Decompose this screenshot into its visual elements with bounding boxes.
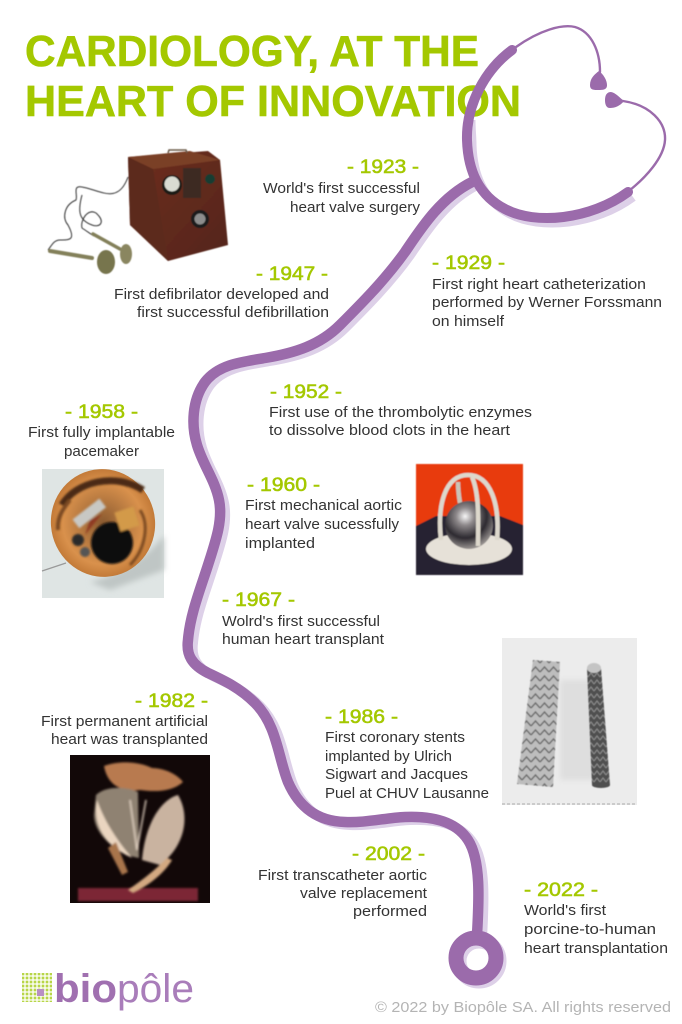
event 1967: Wolrd's first successful — [222, 614, 380, 630]
event 1960 — [245, 475, 402, 552]
event 1958: First fully implantable — [28, 425, 175, 441]
event 1923: heart valve surgery — [290, 200, 421, 216]
event 1986 — [325, 707, 489, 802]
event 1986: implanted by Ulrich — [325, 749, 452, 765]
event 1947: first successful defibrillation — [137, 305, 329, 321]
event 1947: First defibrilator developed and — [114, 287, 329, 303]
event 1929: First right heart catheterization — [432, 277, 646, 293]
title: CARDIOLOGY, AT THE — [25, 27, 479, 76]
chest piece — [456, 938, 496, 978]
event 2022: - 2022 - — [524, 880, 598, 901]
event 2002 — [258, 844, 427, 920]
event 2002: First transcatheter aortic — [258, 868, 427, 884]
logo wordmark: bio — [54, 967, 117, 1011]
event 1982: - 1982 - — [135, 691, 208, 712]
event 2022: World's first — [524, 903, 606, 919]
event 1960: implanted — [245, 536, 315, 552]
event 2002: - 2002 - — [352, 844, 425, 865]
event 1958: - 1958 - — [65, 402, 138, 423]
event 1982: First permanent artificial — [41, 714, 208, 730]
event 1952 — [269, 382, 532, 439]
event 1982 — [41, 691, 208, 748]
event 2002: valve replacement — [300, 886, 427, 902]
event 2022: porcine-to-human — [524, 922, 656, 938]
event 1958: pacemaker — [64, 444, 139, 460]
photo: early defibrillator — [48, 150, 228, 274]
event 1923: World's first successful — [263, 181, 420, 197]
title: HEART OF INNOVATION — [25, 77, 521, 126]
event 1960: - 1960 - — [247, 475, 320, 496]
ear tip upper — [590, 71, 607, 90]
chest piece shadow — [459, 941, 499, 981]
thin tube upper — [516, 26, 600, 72]
event 1929: - 1929 - — [432, 253, 505, 274]
event 1952: First use of the thrombolytic enzymes — [269, 405, 532, 421]
event 1952: to dissolve blood clots in the heart — [269, 423, 510, 439]
loop shadow — [471, 120, 633, 223]
event 1986: - 1986 - — [325, 707, 398, 728]
ear tip lower — [605, 92, 624, 108]
event 1929: performed by Werner Forssmann — [432, 295, 662, 311]
event 1967: human heart transplant — [222, 632, 384, 648]
event 1947: - 1947 - — [256, 264, 328, 285]
stethoscope thick loop — [467, 50, 628, 218]
biopole logo — [22, 967, 194, 1011]
photo: pacemaker — [39, 457, 167, 598]
event 1923 — [263, 157, 421, 216]
title — [25, 27, 521, 126]
event 1967: - 1967 - — [222, 590, 295, 611]
event 1986: First coronary stents — [325, 730, 465, 746]
event 1952: - 1952 - — [270, 382, 342, 403]
event 1960: First mechanical aortic — [245, 498, 402, 514]
event 1929: on himself — [432, 314, 505, 330]
event 2002: performed — [353, 904, 427, 920]
event 1947 — [114, 264, 329, 321]
main tube — [188, 182, 478, 935]
event 1986: Sigwart and Jacques — [325, 767, 468, 783]
logo dot grid — [22, 973, 52, 1002]
thin tube lower — [623, 101, 665, 190]
tube shadow — [193, 185, 483, 938]
event 1958 — [28, 402, 175, 460]
event 2022 — [524, 880, 668, 957]
event 1967 — [222, 590, 384, 648]
event 2022: heart transplantation — [524, 941, 668, 957]
copyright: © 2022 by Biopôle SA. All rights reserved — [375, 1000, 671, 1016]
event 1923: - 1923 - — [347, 157, 419, 178]
photo: artificial heart — [70, 755, 210, 903]
photo: caged ball valve — [416, 464, 523, 575]
event 1929 — [432, 253, 662, 330]
stethoscope timeline — [188, 26, 665, 981]
event 1960: heart valve sucessfully — [245, 517, 400, 533]
photo: coronary stents — [502, 638, 637, 805]
biopole logo: pôle — [117, 967, 194, 1011]
event 1986: Puel at CHUV Lausanne — [325, 786, 489, 802]
event 1982: heart was transplanted — [51, 732, 208, 748]
